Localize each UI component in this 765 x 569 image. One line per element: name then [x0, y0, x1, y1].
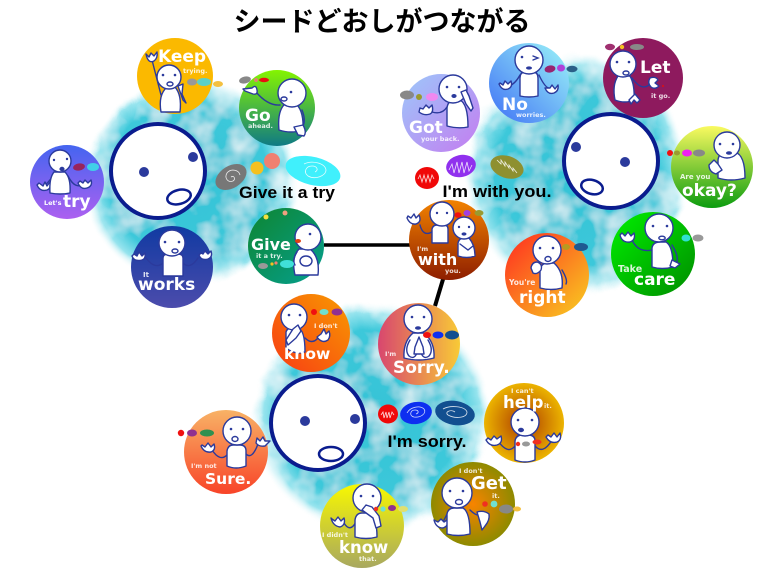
icon: figure: [281, 304, 330, 353]
badge: I don't know: know: [284, 345, 330, 363]
icon: figure: [331, 484, 381, 538]
badge: I don't get it: it.: [492, 492, 500, 500]
label: Keep: [158, 47, 206, 67]
badge: I'm with you: [407, 200, 489, 280]
caption: give it a try: Give it a try: [239, 183, 336, 202]
label: You're: [508, 278, 535, 287]
connector: give to with: [324, 243, 412, 247]
icon: figure: [486, 408, 561, 462]
icon: figure: [531, 236, 566, 290]
badge: I can't help it: help: [503, 393, 544, 412]
icon: figure: [404, 305, 434, 360]
label: Go: [245, 106, 271, 126]
badge: I didn't know that: that.: [359, 555, 377, 563]
icon: figure: [132, 230, 212, 276]
label: I can't: [511, 387, 534, 395]
badge: Take care: [611, 212, 704, 296]
badge: I'm not Sure: Sure.: [205, 470, 251, 488]
watercolor blob: with you cluster: [465, 53, 689, 297]
icon: figure: [419, 75, 473, 128]
connector: with to sorry: [435, 276, 444, 306]
icon: figure: [294, 224, 321, 275]
badge: Give it a try: it a try.: [256, 252, 283, 260]
badge: I can't help it: [484, 383, 564, 463]
badge: I don't know: [272, 294, 350, 372]
label: No: [502, 95, 528, 115]
badge: I'm with you: with: [418, 250, 457, 269]
label: Got: [409, 118, 443, 138]
big face: cluster 2: [564, 114, 658, 208]
badge: Give it a try: [248, 208, 324, 284]
icon: figure: [709, 132, 745, 180]
badge: I'm Sorry: [378, 303, 460, 385]
icon: figure: [243, 79, 306, 136]
badge: Are you okay: [667, 126, 753, 208]
label: Take: [618, 264, 642, 275]
badge: You're right: right: [519, 288, 566, 308]
badge: Keep trying: trying.: [183, 67, 208, 75]
icon: figure: [434, 478, 489, 536]
badge: I didn't know that: know: [339, 538, 388, 557]
badge: Are you okay: okay?: [682, 181, 737, 201]
label: Let: [640, 58, 670, 78]
caption: I'm with you: I'm with you.: [442, 182, 552, 201]
badge: Got your back: [400, 74, 480, 152]
icon: figure: [37, 150, 92, 194]
badge: I'm not Sure: [178, 410, 270, 494]
label: Are you: [680, 173, 710, 181]
badge: Got your back: your back.: [421, 135, 459, 143]
icon: figure: [146, 52, 186, 112]
label: Give: [251, 235, 291, 254]
caption: I'm sorry: I'm sorry.: [388, 432, 466, 451]
icon: figure: [499, 46, 558, 97]
badge: Take care: care: [634, 270, 675, 290]
badge: No worries: [489, 43, 578, 123]
label: I don't: [314, 322, 338, 330]
badge: Let's try: [30, 145, 104, 219]
label: I didn't: [322, 531, 348, 539]
seeds: I'm sorry: [378, 398, 477, 428]
big face: cluster 1: [111, 124, 205, 218]
seeds: give it a try: [211, 151, 344, 195]
label: I don't: [459, 467, 483, 475]
icon: figure: [201, 417, 270, 468]
badge: Let it go: [603, 38, 683, 118]
badge: I'm Sorry: Sorry.: [393, 358, 450, 378]
badge: You're right: [505, 233, 589, 317]
label: It: [143, 271, 150, 279]
icon: figure: [620, 214, 680, 268]
big face: cluster 3: [271, 376, 365, 470]
icon: figures: [407, 202, 475, 258]
badge: Go ahead: ahead.: [248, 122, 273, 130]
badge: No worries: worries.: [516, 111, 546, 119]
badge: Let's try: try: [63, 192, 91, 212]
badge: I'm with you: you.: [445, 267, 461, 275]
label: I'm not: [191, 462, 217, 470]
badge: I didn't know that: [320, 484, 408, 568]
title: シードどおしがつながる: [234, 6, 530, 37]
badge: It works: [131, 226, 213, 308]
label: I'm: [385, 350, 396, 358]
badge: I can't help it: it.: [544, 402, 552, 410]
label: Let's: [44, 199, 62, 207]
badge: Go ahead: [238, 70, 315, 146]
label: I'm: [417, 245, 428, 253]
watercolor blob: sorry cluster: [252, 302, 492, 534]
badge: I don't get it: Get: [471, 473, 507, 494]
badge: I don't get it: [431, 462, 521, 546]
watercolor blob: give it a try cluster: [82, 78, 298, 286]
badge: Let it go: it go.: [651, 92, 670, 100]
badge: It works: works: [138, 275, 195, 295]
badge: Keep trying: [137, 38, 223, 114]
seeds: I'm with you: [415, 151, 527, 189]
icon: figure: [610, 51, 664, 104]
